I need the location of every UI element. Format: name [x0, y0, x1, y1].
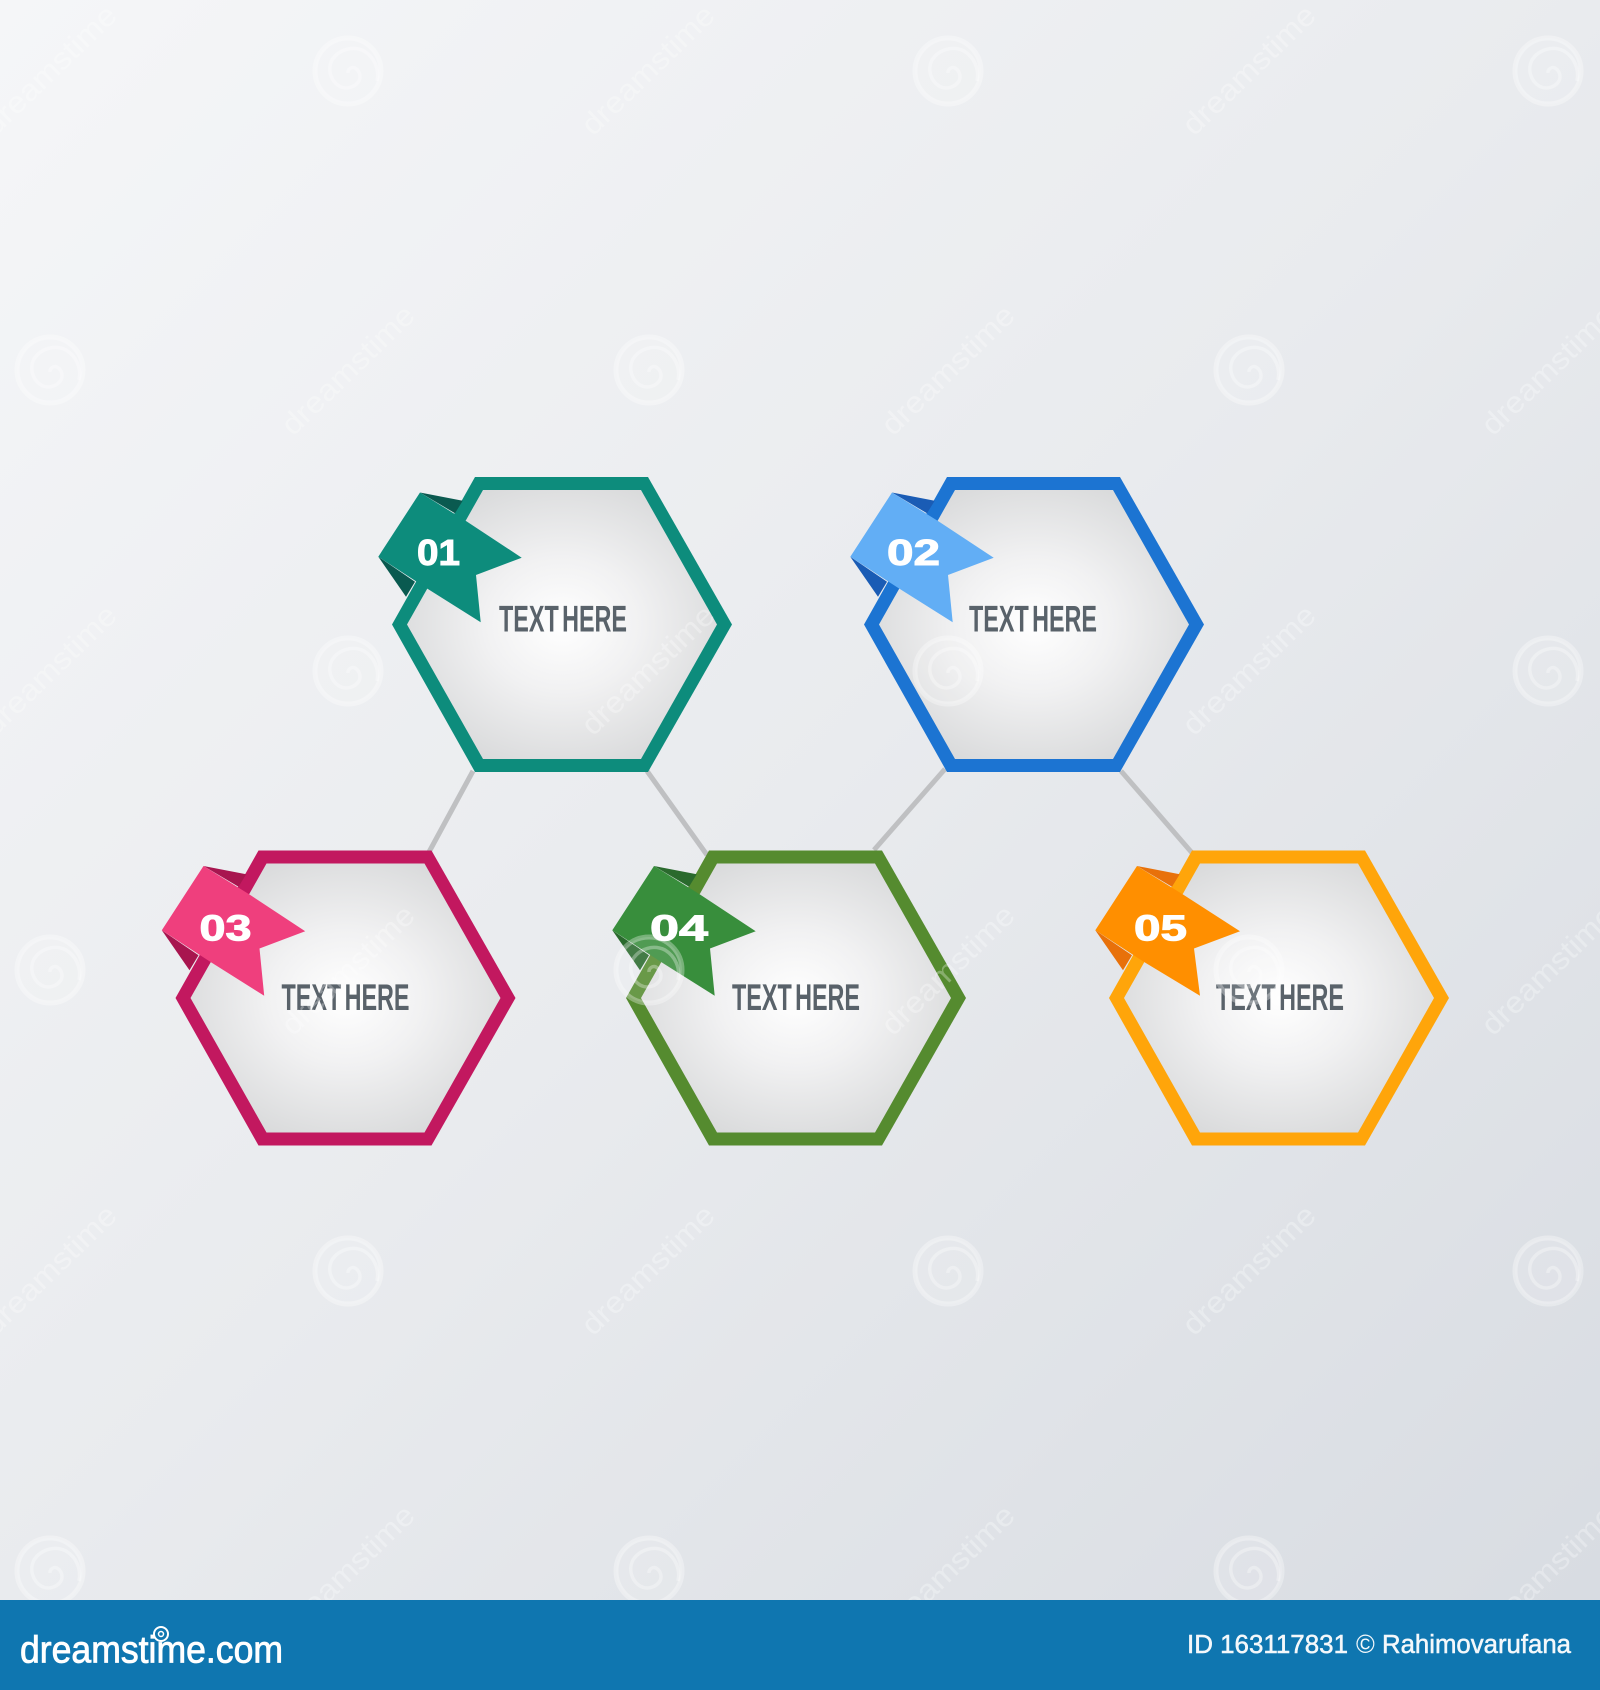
- label 03: TEXT HERE: [282, 977, 410, 1018]
- interior 04: [641, 864, 951, 1132]
- hexagon 05: [1095, 850, 1449, 1146]
- interior 03: [190, 864, 500, 1132]
- connector lines: [429, 769, 1193, 855]
- watermark text: dreamstime: [1176, 1199, 1323, 1342]
- number 04: 04: [650, 908, 708, 949]
- ribbon 02: [850, 492, 994, 622]
- watermark text: dreamstime: [575, 0, 722, 142]
- label 04: TEXT HERE: [732, 977, 860, 1018]
- watermark text: dreamstime: [575, 599, 722, 742]
- hexagon 04: [612, 850, 966, 1146]
- ribbon 01: [378, 492, 522, 622]
- footer credit: ©: [1356, 1631, 1375, 1659]
- label 05: TEXT HERE: [1216, 977, 1344, 1018]
- label 02: TEXT HERE: [969, 598, 1097, 640]
- watermark text: dreamstime: [1176, 599, 1323, 742]
- footer logo: dreamstime.com: [20, 1630, 283, 1672]
- hexagon 03: [162, 850, 516, 1146]
- interior 05: [1124, 864, 1434, 1132]
- watermark text: dreamstime: [875, 1499, 1022, 1642]
- label 01: TEXT HERE: [499, 598, 627, 640]
- frame 03: [176, 850, 516, 1146]
- frame 05: [1109, 850, 1449, 1146]
- watermark text: dreamstime: [875, 899, 1022, 1042]
- frame 02: [864, 477, 1204, 772]
- frame 01: [392, 477, 732, 772]
- watermark text: dreamstime: [275, 299, 422, 442]
- watermark text: dreamstime: [1176, 0, 1323, 142]
- ribbon 05: [1095, 866, 1240, 996]
- ribbon 04: [612, 866, 756, 996]
- number 03: 03: [200, 908, 252, 949]
- number 02: 02: [887, 532, 940, 573]
- number 01: 01: [417, 532, 460, 573]
- footer credit: ID 163117831: [1187, 1631, 1348, 1659]
- frame 04: [626, 850, 966, 1146]
- footer credit: [1187, 1631, 1572, 1659]
- watermark text: dreamstime: [875, 299, 1022, 442]
- watermark text: dreamstime: [275, 899, 422, 1042]
- footer credit: Rahimovarufana: [1382, 1631, 1572, 1659]
- hexagon 02: [850, 477, 1204, 772]
- watermark text: dreamstime: [275, 1499, 422, 1642]
- interior 02: [879, 490, 1189, 759]
- interior 01: [407, 490, 717, 759]
- hexagon 01: [378, 477, 732, 772]
- watermark text: dreamstime: [575, 1199, 722, 1342]
- footer banner: [0, 1600, 1600, 1690]
- ribbon 03: [162, 866, 305, 996]
- number 05: 05: [1134, 908, 1187, 949]
